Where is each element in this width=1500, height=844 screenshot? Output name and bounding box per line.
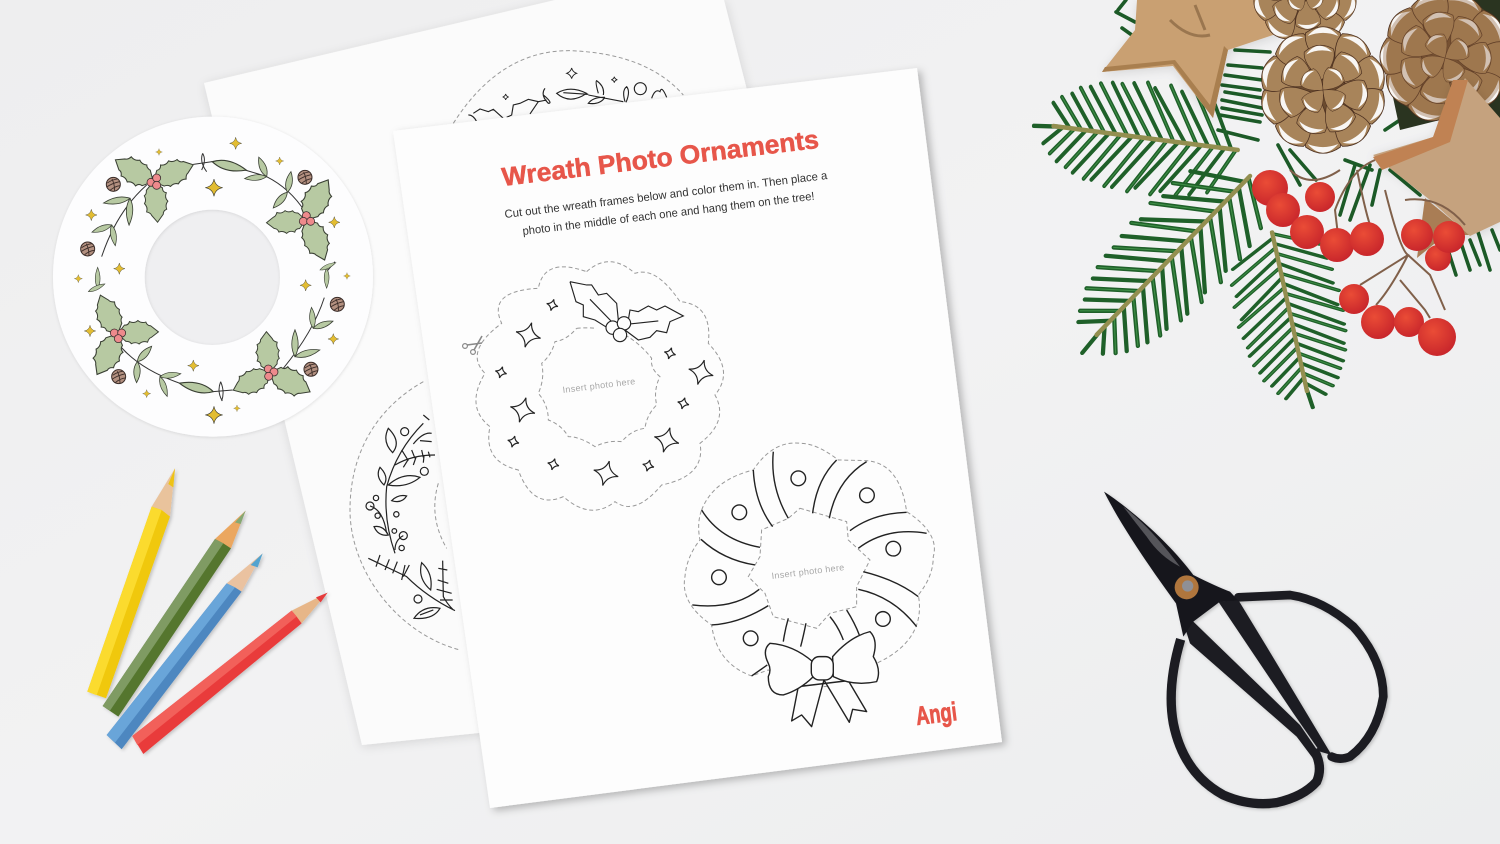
red berries <box>1252 170 1465 356</box>
small leaves <box>87 156 337 397</box>
scissors cut mark <box>463 336 482 354</box>
gold sparkles <box>74 137 350 424</box>
greenery arrangement <box>1027 0 1500 419</box>
insert photo label 1: Insert photo here <box>562 376 636 395</box>
holly leaves <box>86 149 339 403</box>
lower wooden star <box>1373 78 1500 258</box>
left wreath on back page <box>350 382 460 650</box>
colored holly wreath cutout <box>53 117 373 437</box>
ribbon bows <box>202 153 223 401</box>
small pine cones <box>81 170 344 384</box>
upper wooden star <box>1102 0 1288 118</box>
red berries <box>110 174 315 380</box>
instructions: Cut out the wreath frames below and color them in. Then place a <box>504 170 829 221</box>
bow <box>765 632 878 727</box>
pine cones <box>1250 0 1500 153</box>
shears arms <box>1178 600 1332 763</box>
fir branch lower left <box>1043 139 1288 388</box>
Angi logo: Angi <box>914 696 958 731</box>
back worksheet page <box>204 0 800 745</box>
top wreath on back page <box>453 51 683 123</box>
blue pencil <box>107 553 263 749</box>
holly wreath outline <box>476 262 724 510</box>
green pencil <box>103 511 246 717</box>
background needles <box>1116 0 1500 275</box>
instructions: photo in the middle of each one and hang them on the tree! <box>522 191 815 238</box>
blades <box>1104 492 1238 637</box>
fir branch bottom <box>1220 221 1362 419</box>
twigs <box>1290 160 1465 318</box>
red pencil <box>132 593 328 754</box>
title: Wreath Photo Ornaments <box>500 124 820 192</box>
ornament wreath outline <box>684 443 934 727</box>
handle loops <box>1238 595 1383 759</box>
yellow pencil <box>87 468 175 698</box>
colored pencils <box>87 468 328 754</box>
fir branch left <box>1027 69 1245 205</box>
pivot screw <box>1175 575 1199 599</box>
insert photo label 2: Insert photo here <box>771 562 845 581</box>
front worksheet page <box>393 68 1002 808</box>
wreath stems <box>102 162 335 392</box>
scissors <box>1104 492 1383 804</box>
